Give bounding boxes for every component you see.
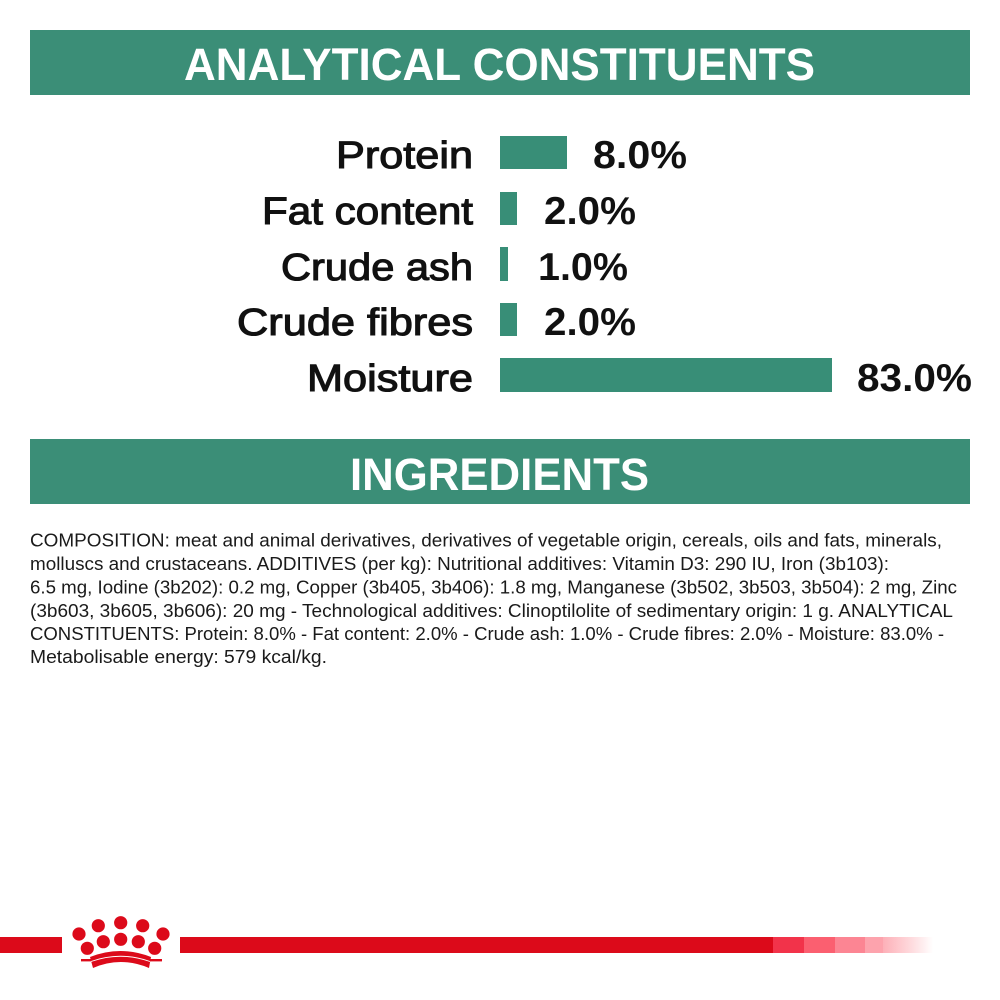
row: crude fibres — [237, 301, 636, 344]
heading: ingredients — [30, 439, 970, 504]
text block: composition: molluscs and crustaceans. ADDITIVES (per kg): Nutritional additives: Vitamin D3: 290 IU, Iron (3b103): — [30, 553, 889, 574]
footer: red stripe — [0, 937, 933, 953]
row: protein: 8.0% — [593, 134, 687, 177]
text block: composition: CONSTITUENTS: Protein: 8.0% - Fat content: 2.0% - Crude ash: 1.0% - Crude fibres: 2.0% - Moisture: 83.0% - — [30, 623, 944, 644]
row: protein: Protein — [336, 135, 473, 177]
text block: composition: 6.5 mg, Iodine (3b202): 0.2 mg, Copper (3b405, 3b406): 1.8 mg, Manganese (3b502, 3b503, 3b504): 2 mg, Zinc — [30, 576, 957, 598]
icon: royal canin crown logo — [72, 916, 170, 968]
row: fat content — [262, 190, 636, 233]
text block: composition: (3b603, 3b605, 3b606): 20 mg - Technological additives: Clinoptilolite of sedimentary origin: 1 g. ANALYTICAL — [30, 600, 953, 621]
row: fat content: Fat content — [262, 191, 473, 233]
row: moisture — [307, 357, 972, 400]
row: moisture: 83.0% — [857, 357, 972, 400]
row: crude fibres: Crude fibres — [237, 302, 473, 344]
row: crude ash: 1.0% — [538, 246, 628, 289]
text block: composition: Metabolisable energy: 579 kcal/kg. — [30, 646, 327, 667]
heading: analytical constituents: ANALYTICAL CONSTITUENTS — [184, 39, 815, 90]
heading: ingredients: INGREDIENTS — [350, 449, 649, 500]
row: crude fibres: 2.0% — [544, 301, 636, 344]
text block: composition — [30, 530, 957, 667]
row: fat content: 2.0% — [544, 190, 636, 233]
text block: composition: COMPOSITION: meat and animal derivatives, derivatives of vegetable origin, cereals, oils and fats, minerals, — [30, 530, 942, 550]
bar chart: analytical constituents — [237, 134, 972, 400]
row: crude ash: Crude ash — [281, 247, 473, 289]
row: moisture: Moisture — [307, 358, 473, 400]
heading: analytical constituents — [30, 30, 970, 95]
row: crude ash — [281, 246, 628, 289]
row: protein — [336, 134, 687, 177]
